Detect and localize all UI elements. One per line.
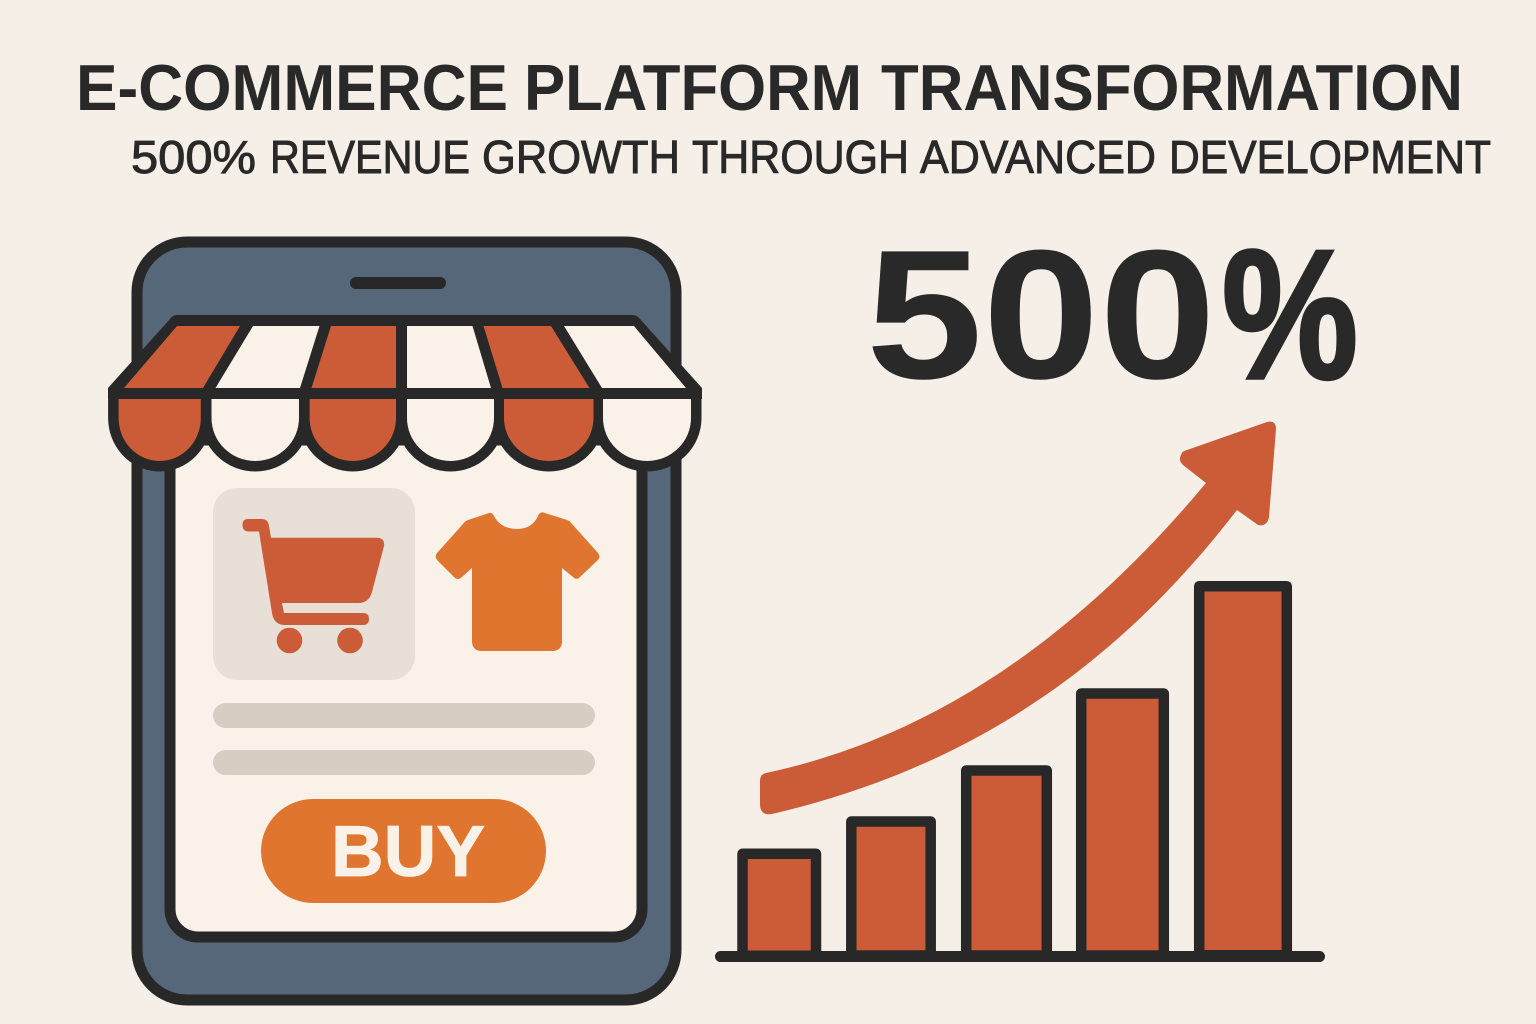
phone body xyxy=(137,242,676,1000)
subtitle: GROWTH xyxy=(482,131,680,183)
buy button: BUY xyxy=(331,812,485,892)
big number: % xyxy=(1222,211,1358,417)
buy button xyxy=(261,799,546,903)
subtitle: 500% xyxy=(131,131,256,183)
subtitle: REVENUE xyxy=(270,131,470,183)
text placeholder bars xyxy=(213,703,595,775)
title: E-COMMERCE xyxy=(76,51,508,124)
icon: mobile storefront xyxy=(108,242,702,1000)
phone screen xyxy=(170,440,642,937)
subtitle: THROUGH xyxy=(692,131,909,183)
title: PLATFORM xyxy=(524,51,862,124)
bar chart xyxy=(715,586,1325,962)
subtitle: DEVELOPMENT xyxy=(1169,131,1491,183)
big number: 500 xyxy=(866,211,1216,417)
scallop outlines xyxy=(119,399,691,461)
awning roof stripes xyxy=(124,326,686,388)
subtitle: ADVANCED xyxy=(920,131,1156,183)
product tile with cart xyxy=(213,488,415,680)
awning xyxy=(108,315,702,461)
title: TRANSFORMATION xyxy=(881,51,1463,124)
growth arrow xyxy=(760,422,1276,814)
chart baseline xyxy=(715,951,1325,962)
phone speaker xyxy=(350,277,446,289)
awning frame xyxy=(108,315,702,399)
icon: t-shirt xyxy=(436,512,600,651)
scallop fills xyxy=(119,399,691,461)
